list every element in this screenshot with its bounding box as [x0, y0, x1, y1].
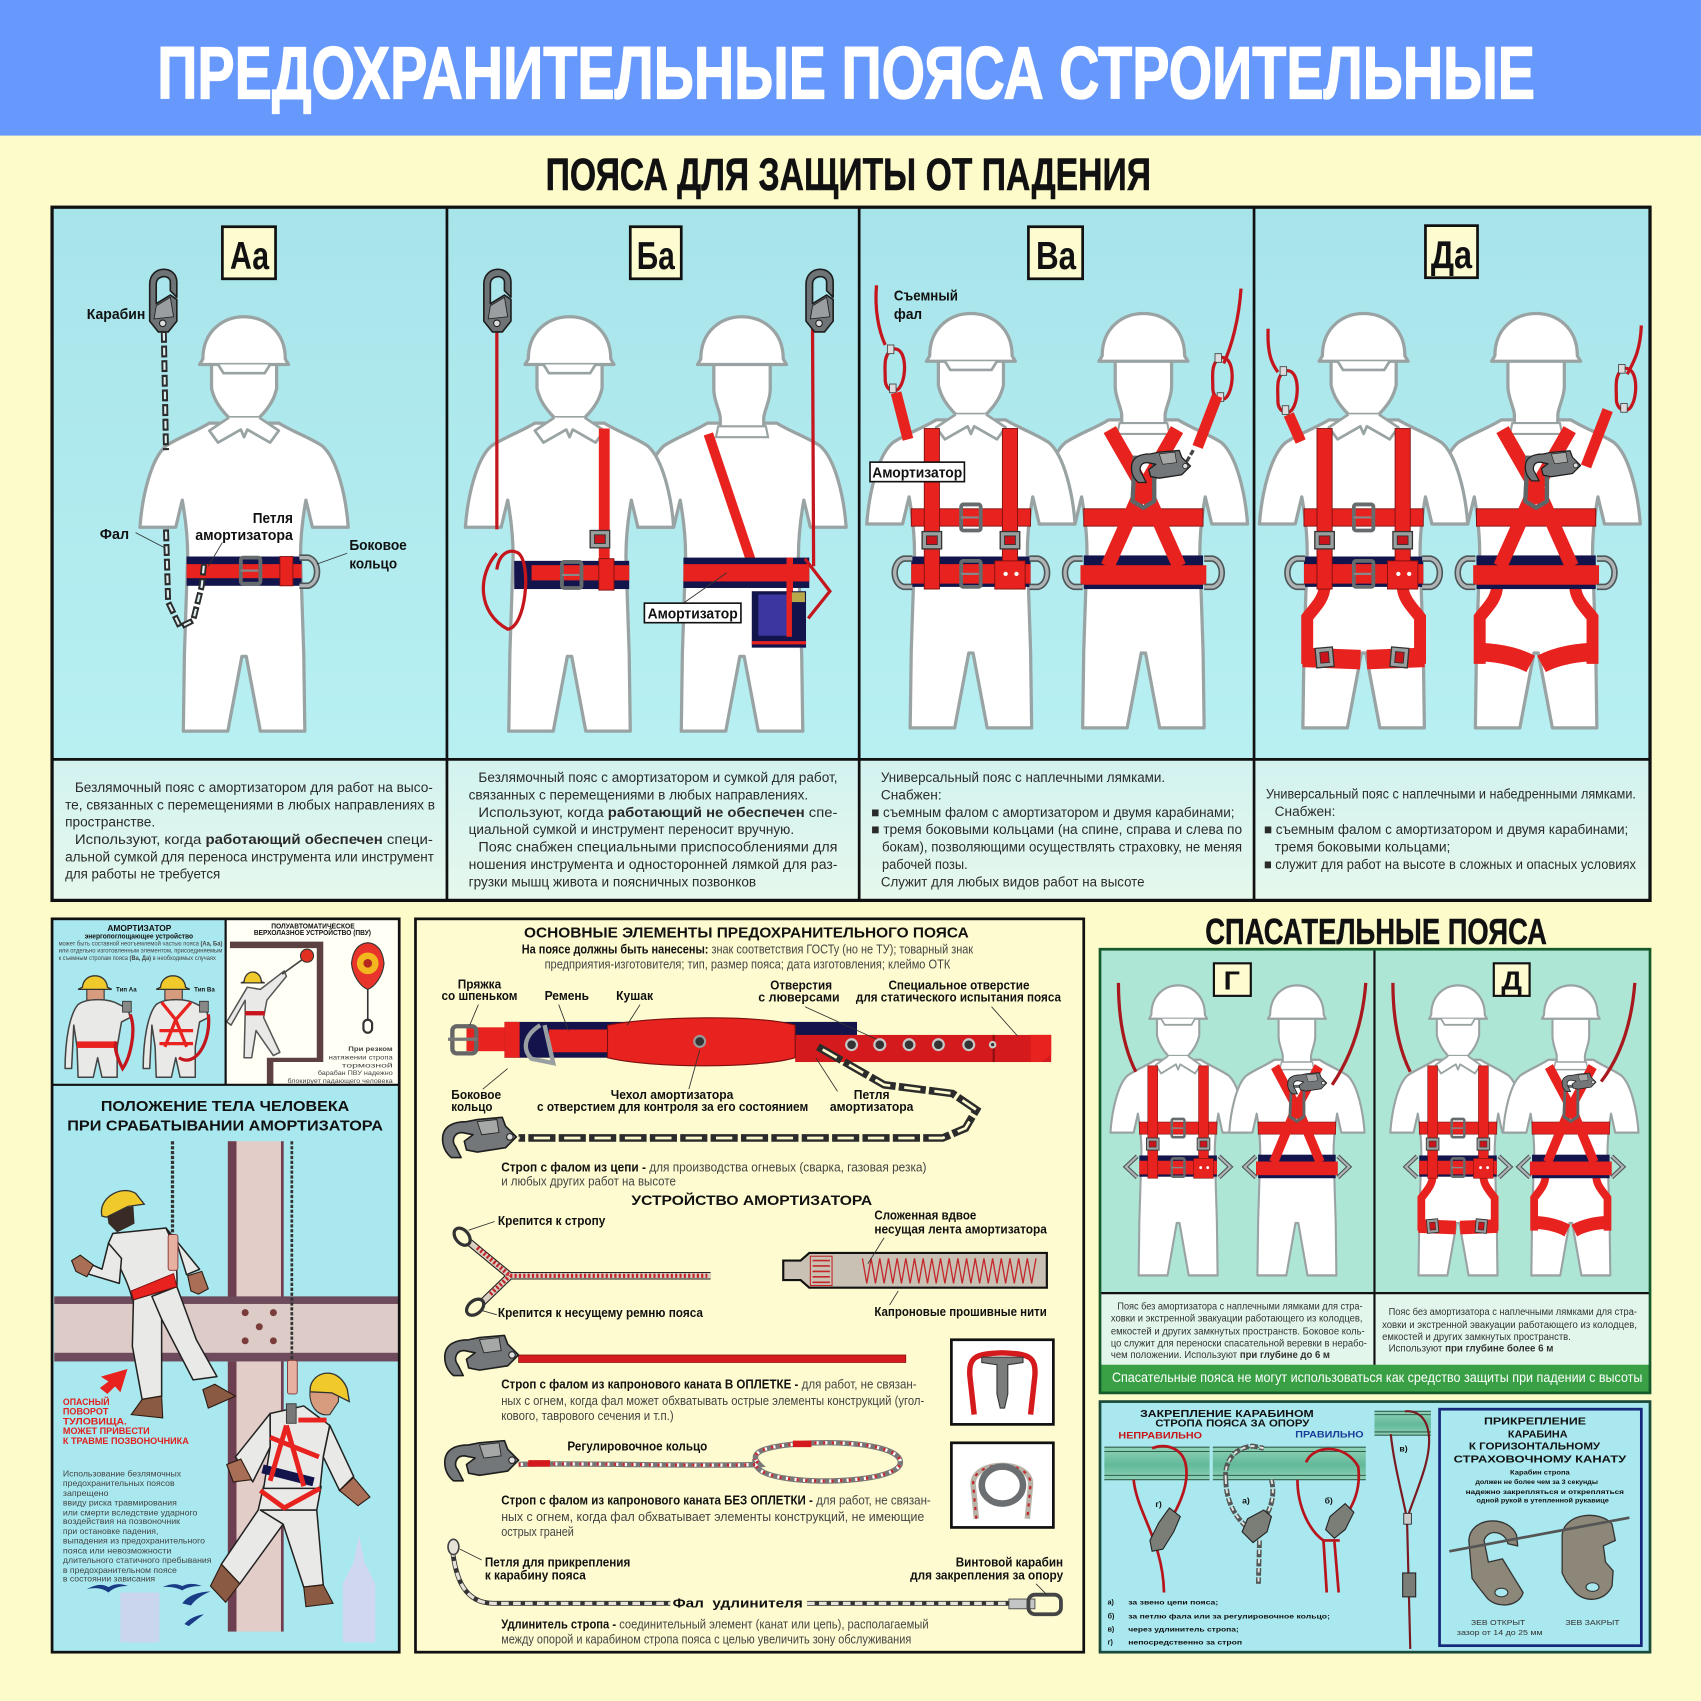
red arrow: [100, 1369, 127, 1394]
device note: При резком: [348, 1047, 393, 1053]
braided lanyard text: ных с огнем, когда фал может обхватывать острые элементы конструкций (угол-: [501, 1394, 924, 1408]
legend: а): [1108, 1599, 1114, 1606]
description Г: [1111, 1300, 1367, 1361]
labels Ва: Съемный: [894, 288, 958, 304]
case а: а): [1242, 1496, 1250, 1506]
type Г: [1110, 963, 1366, 1275]
amortizer heading: АМОРТИЗАТОР: [107, 924, 172, 933]
legend: б): [1108, 1613, 1114, 1621]
type Aa: [87, 227, 407, 731]
unbraided lanyard: Регулировочное кольцо: [567, 1438, 707, 1453]
description Ба: Безлямочный пояс с амортизатором и сумкой для работ,: [478, 769, 837, 785]
description Ва: Служит для любых видов работ на высоте: [881, 873, 1145, 889]
green beams: [1104, 1411, 1431, 1480]
belt labels: с отверстием для контроля за его состоянием: [537, 1099, 808, 1114]
chain lanyard text: [501, 1161, 926, 1189]
green warning bar: [1100, 1365, 1650, 1393]
box: attaching carabiner to safety rope: надежно закрепляться и открепляться: [1466, 1489, 1624, 1496]
buildings: [120, 1535, 375, 1642]
green warning bar: Спасательные пояса не могут использоваться как средство защиты при падении с высоты: [1112, 1370, 1642, 1385]
labels Aa: Петля: [253, 511, 293, 527]
belt labels: с люверсами: [758, 989, 840, 1004]
extender: [448, 1539, 1061, 1614]
labels Aa: [87, 307, 407, 572]
description Г: чем положении. Используют при глубине до 6 м: [1111, 1349, 1330, 1361]
worker type Ba: [143, 976, 215, 1077]
description Ва: Универсальный пояс с наплечными лямками.: [881, 769, 1165, 785]
description Ба: Используют, когда работающий не обеспечен спе-: [478, 804, 838, 820]
safety rope: [1449, 1518, 1629, 1551]
unbraided lanyard: [445, 1438, 900, 1481]
amortizer heading: энергопоглощающее устройство: [85, 931, 193, 940]
extender text: между опорой и карабином стропа пояса с целью увеличить зону обслуживания: [501, 1633, 911, 1647]
legend: [1108, 1599, 1330, 1647]
letter Г: [1214, 963, 1251, 996]
type Д: [1390, 963, 1639, 1275]
description Ба: Пояс снабжен специальными приспособлениями для: [478, 839, 837, 855]
unbraided lanyard text: ных с огнем, когда фал обхватывает элементы конструкций, не имеющие: [501, 1510, 924, 1524]
device heading: ВЕРХОЛАЗНОЕ УСТРОЙСТВО (ПВУ): [254, 928, 371, 937]
box: attaching carabiner to safety rope: СТРАХОВОЧНОМУ КАНАТУ: [1454, 1454, 1627, 1465]
warning text: ОПАСНЫЙ: [63, 1396, 110, 1407]
device note: барабан ПВУ надежно: [318, 1071, 393, 1077]
explanatory text: в состоянии зависания: [63, 1574, 155, 1584]
description Д: [1382, 1306, 1637, 1355]
panel: fall protection belt types: [52, 207, 1650, 900]
label Амортизатор: Амортизатор: [648, 606, 738, 622]
heading main elements: ОСНОВНЫЕ ЭЛЕМЕНТЫ ПРЕДОХРАНИТЕЛЬНОГО ПОЯСА: [524, 925, 969, 941]
description Ба: грузки мышц живота и поясничных позвонков: [469, 873, 756, 889]
extender labels: [460, 1549, 1064, 1595]
description Aa: пространстве.: [65, 814, 155, 830]
birds: [87, 1584, 210, 1626]
labels Ва: [870, 288, 964, 482]
extender labels: к карабину пояса: [485, 1567, 586, 1582]
legend: за звено цепи пояса;: [1128, 1599, 1218, 1606]
case г: г): [1155, 1499, 1162, 1509]
amortizer labels: Сложенная вдвое: [874, 1207, 976, 1222]
type Да: [1259, 226, 1641, 728]
detail: rope over T-beam: [951, 1340, 1053, 1424]
belt labels: Специальное отверстие: [888, 977, 1029, 992]
description Ва: бокам), позволяющими осуществлять страховку, не меняя: [882, 839, 1242, 855]
device note: блокирует падающего человека: [287, 1079, 393, 1085]
belt labels: Боковое: [451, 1087, 501, 1102]
heading fastening: ПРАВИЛЬНО: [1295, 1429, 1364, 1439]
box: attaching carabiner to safety rope: ПРИКРЕПЛЕНИЕ: [1484, 1416, 1587, 1427]
warning text: ПОВОРОТ: [63, 1407, 109, 1417]
description Г: ховки и экстренной эвакуации работающего из колодцев,: [1111, 1312, 1363, 1324]
box: attaching carabiner to safety rope: К ГОРИЗОНТАЛЬНОМУ: [1469, 1441, 1601, 1452]
panel: shock absorber: [52, 919, 226, 1085]
unbraided lanyard text: [501, 1494, 931, 1539]
belt labels: для статического испытания пояса: [856, 989, 1062, 1004]
case б: [1297, 1449, 1359, 1593]
amortizer note: [59, 940, 222, 962]
amortizer strip: [783, 1253, 1047, 1288]
box: attaching carabiner to safety rope: зазор от 14 до 25 мм: [1457, 1628, 1543, 1637]
belt labels: кольцо: [451, 1099, 493, 1114]
explanatory text: [63, 1468, 212, 1584]
labels Ва: фал: [894, 307, 922, 323]
description Да: ■ съемным фалом с амортизатором и двумя карабинами;: [1264, 821, 1628, 837]
panel: fall arrest device: [226, 919, 399, 1085]
heading body position: ПОЛОЖЕНИЕ ТЕЛА ЧЕЛОВЕКА: [101, 1099, 350, 1115]
panel: carabin fastening: [1100, 1402, 1650, 1652]
heading amortizer device: УСТРОЙСТВО АМОРТИЗАТОРА: [631, 1191, 872, 1208]
warning text: К ТРАВМЕ ПОЗВОНОЧНИКА: [63, 1436, 189, 1446]
amortizer note: или отдельно изготовленным элементом, присоединяемым: [59, 948, 222, 954]
explanatory text: Использование безлямочных: [63, 1468, 182, 1478]
letter Д: Д: [1501, 965, 1523, 995]
description Да: Универсальный пояс с наплечными и набедренными лямками.: [1266, 785, 1636, 801]
description Aa: Используют, когда работающий обеспечен специ-: [75, 831, 433, 847]
box: attaching carabiner to safety rope: Карабин стропа: [1510, 1468, 1570, 1476]
description Ва: ■ съемным фалом с амортизатором и двумя карабинами;: [871, 804, 1235, 820]
explanatory text: запрещено: [63, 1488, 109, 1498]
unbraided lanyard text: острых граней: [501, 1525, 574, 1539]
description Да: [1264, 785, 1636, 872]
letter Д: [1494, 963, 1530, 996]
labels Aa: Боковое: [349, 538, 407, 554]
description Да: Снабжен:: [1275, 803, 1335, 819]
description Aa: [65, 779, 435, 882]
marking note: [522, 943, 974, 972]
box: attaching carabiner to safety rope: ЗЕВ ОТКРЫТ: [1471, 1618, 1526, 1627]
amortizer note: может быть составной неотъемлемой частью пояса (Аа, Ба): [59, 940, 222, 947]
extender: Фал удлинителя: [673, 1596, 803, 1611]
box: attaching carabiner to safety rope: должен не более чем за 3 секунды: [1475, 1478, 1598, 1486]
letter Г: Г: [1224, 965, 1240, 995]
chain lanyard text: и любых других работ на высоте: [501, 1175, 676, 1189]
amortizer Y strap: [451, 1225, 711, 1318]
chain lanyard text: Строп с фалом из цепи - для производства огневых (сварка, газовая резка): [501, 1161, 926, 1175]
device heading: ПОЛУАВТОМАТИЧЕСКОЕ: [271, 924, 355, 931]
heading body position: [67, 1099, 383, 1134]
description Да: тремя боковыми кольцами;: [1275, 839, 1450, 855]
box: attaching carabiner to safety rope: КАРАБИНА: [1508, 1429, 1568, 1440]
heading fastening: [1118, 1409, 1364, 1440]
description Aa: для работы не требуется: [65, 866, 220, 882]
legend: в): [1108, 1627, 1114, 1634]
worker with harness: [210, 1360, 370, 1607]
amortizer labels: несущая лента амортизатора: [874, 1221, 1048, 1236]
amortizer labels: [469, 1207, 1048, 1320]
explanatory text: при остановке падения,: [63, 1526, 158, 1536]
device note: тормозной: [342, 1062, 393, 1069]
heading fastening: НЕПРАВИЛЬНО: [1118, 1430, 1202, 1440]
labels Aa: кольцо: [349, 556, 397, 572]
legend: непосредственно за строп: [1128, 1640, 1242, 1647]
description Д: Пояс без амортизатора с наплечными лямками для стра-: [1389, 1306, 1637, 1318]
belt labels: Петля: [854, 1087, 890, 1102]
explanatory text: длительного статичного пребывания: [63, 1555, 212, 1565]
description Г: цо служит для переноски спасательной веревки в нерабо-: [1111, 1337, 1367, 1349]
explanatory text: воздействия на позвоночник: [63, 1516, 180, 1526]
extender labels: Винтовой карабин: [956, 1554, 1063, 1569]
label Амортизатор: [644, 573, 741, 623]
explanatory text: в предохранительном поясе: [63, 1565, 177, 1575]
labels Ва: Амортизатор: [872, 465, 962, 481]
extender text: [501, 1617, 929, 1647]
device note: [287, 1047, 393, 1085]
belt labels: со шпеньком: [442, 988, 517, 1003]
heading: fall protection belts: ПОЯСА ДЛЯ ЗАЩИТЫ ОТ ПАДЕНИЯ: [546, 149, 1151, 200]
braided lanyard: [445, 1335, 906, 1376]
amortizer heading: [85, 924, 193, 940]
box: attaching carabiner to safety rope: [1440, 1409, 1641, 1646]
letter Ва: [1028, 227, 1083, 279]
description Да: ■ служит для работ на высоте в сложных и опасных условиях: [1264, 856, 1636, 872]
device note: натяжении стропа: [329, 1055, 393, 1061]
description Ба: [469, 769, 838, 889]
tool bag: [752, 591, 806, 648]
worker type Aa: Тип Аа: [116, 988, 137, 994]
chain 1: [171, 1141, 174, 1237]
explanatory text: или смерти вследствие ударного: [63, 1507, 198, 1517]
letter Да: Да: [1431, 234, 1472, 277]
description Г: Пояс без амортизатора с наплечными лямками для стра-: [1117, 1300, 1363, 1312]
belt diagram: [443, 1018, 1051, 1158]
amortizer note: к съемным стропам пояса (Ва, Да) в необходимых случаях: [59, 956, 216, 962]
steel column and beam: [54, 1141, 398, 1632]
letter Ба: [630, 227, 681, 279]
braided lanyard text: Строп с фалом из капронового каната В ОПЛЕТКЕ - для работ, не связан-: [501, 1378, 917, 1392]
belt labels: Пряжка: [458, 976, 502, 991]
box: attaching carabiner to safety rope: ЗЕВ ЗАКРЫТ: [1565, 1618, 1620, 1627]
detail: rope around round bar: [951, 1443, 1053, 1527]
case б: б): [1325, 1496, 1333, 1506]
type Ва: [867, 227, 1248, 728]
marking note: предприятия-изготовителя; тип, размер пояса; дата изготовления; клеймо ОТК: [545, 958, 951, 972]
explanatory text: выпадения из предохранительного: [63, 1536, 205, 1546]
closed carabiner: [1562, 1515, 1615, 1599]
description Ва: рабочей позы.: [882, 856, 968, 872]
letter Ба: Ба: [637, 235, 675, 278]
panel: main belt elements: [415, 919, 1084, 1652]
worker falling incorrectly: [72, 1191, 235, 1418]
braided lanyard text: кового, таврового сечения и т.п.): [501, 1409, 674, 1423]
case в: в): [1399, 1443, 1408, 1453]
worker type Ba: Тип Ва: [194, 988, 215, 994]
amortizer labels: Крепится к несущему ремню пояса: [498, 1305, 704, 1320]
worker on device: [227, 949, 314, 1058]
labels Aa: амортизатора: [195, 528, 294, 544]
description Ва: [871, 769, 1242, 889]
description Ба: циальной сумкой и инструмент переносит вручную.: [469, 821, 794, 837]
heading fastening: ЗАКРЕПЛЕНИЕ КАРАБИНОМ: [1140, 1409, 1314, 1420]
warning text: ТУЛОВИЩА.: [63, 1416, 127, 1426]
belt labels: амортизатора: [830, 1099, 914, 1114]
extender text: Удлинитель стропа - соединительный элемент (канат или цепь), располагаемый: [501, 1617, 929, 1631]
description Ва: ■ тремя боковыми кольцами (на спине, справа и слева по: [871, 821, 1242, 837]
marking note: На поясе должны быть нанесены: знак соответствия ГОСТу (но не ТУ); товарный знак: [522, 943, 974, 957]
worker type Aa: [65, 976, 137, 1077]
legend: за петлю фала или за регулировочное кольцо;: [1128, 1614, 1330, 1621]
belt labels: Чехол амортизатора: [611, 1087, 734, 1102]
case а: [1226, 1446, 1273, 1584]
description Ба: ношения инструмента и односторонней лямкой для раз-: [469, 856, 838, 872]
description Ва: Снабжен:: [881, 787, 942, 803]
labels Aa: Карабин: [87, 307, 145, 323]
header band: [0, 0, 1701, 136]
description Д: ховки и экстренной эвакуации работающего из колодцев,: [1382, 1319, 1637, 1331]
heading: rescue belts: СПАСАТЕЛЬНЫЕ ПОЯСА: [1205, 912, 1547, 952]
device heading: [254, 924, 371, 937]
structure: [230, 942, 323, 1085]
braided lanyard text: [501, 1378, 924, 1423]
chain 2: [291, 1141, 293, 1361]
description Ба: связанных с перемещениями в любых направлениях.: [469, 787, 808, 803]
open carabiner: [1469, 1521, 1523, 1605]
device enlarged: [351, 943, 384, 1033]
case в: [1391, 1411, 1429, 1649]
heading fastening: СТРОПА ПОЯСА ЗА ОПОРУ: [1155, 1419, 1310, 1430]
panel: rescue belts: [1100, 949, 1650, 1393]
description Aa: те, связанных с перемещениями в любых направлениях в: [65, 796, 435, 812]
explanatory text: ввиду риска травмирования: [63, 1498, 177, 1508]
extender labels: Петля для прикрепления: [485, 1554, 630, 1569]
extender labels: для закрепления за опору: [910, 1567, 1064, 1582]
panel: body position: [52, 919, 399, 1652]
amortizer labels: Капроновые прошивные нити: [874, 1304, 1047, 1319]
explanatory text: предохранительных поясов: [63, 1478, 175, 1488]
amortizer labels: Крепится к стропу: [498, 1213, 606, 1228]
unbraided lanyard text: Строп с фалом из капронового каната БЕЗ ОПЛЕТКИ - для работ, не связан-: [501, 1494, 931, 1508]
letter Aa: Аа: [230, 235, 269, 278]
description Д: емкостей и других замкнутых пространств.: [1382, 1332, 1571, 1343]
heading body position: ПРИ СРАБАТЫВАНИИ АМОРТИЗАТОРА: [67, 1118, 383, 1134]
warning text: МОЖЕТ ПРИВЕСТИ: [63, 1426, 150, 1436]
belt labels: Ремень: [545, 988, 589, 1003]
type Ба: [465, 227, 846, 731]
warning text: [63, 1396, 189, 1446]
description Г: емкостей и других замкнутых пространств. Боковое коль-: [1111, 1326, 1365, 1337]
belt labels: Отверстия: [770, 977, 832, 992]
description Aa: Безлямочный пояс с амортизатором для работ на высо-: [75, 779, 433, 795]
explanatory text: пояса или невозможности: [63, 1545, 172, 1555]
case г: [1134, 1446, 1187, 1593]
box: attaching carabiner to safety rope: одной рукой в утепленной рукавице: [1476, 1496, 1609, 1504]
description Д: Используют при глубине более 6 м: [1389, 1343, 1553, 1355]
letter Aa: [222, 227, 276, 279]
legend: через удлинитель стропа;: [1128, 1627, 1239, 1634]
description Aa: альной сумкой для переноса инструмента или инструмент: [65, 848, 434, 864]
letter Ва: Ва: [1036, 235, 1076, 278]
legend: г): [1108, 1640, 1113, 1647]
labels Aa: Фал: [100, 527, 129, 543]
belt labels: [442, 976, 1062, 1114]
belt labels: Кушак: [616, 988, 654, 1003]
